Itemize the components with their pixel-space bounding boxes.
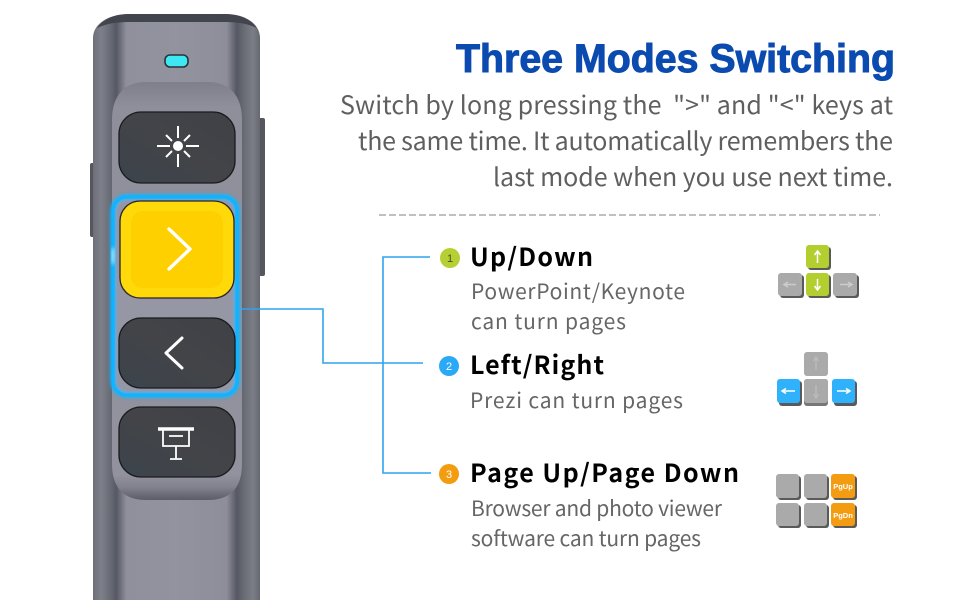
mode 1 heading: Up/Down — [470, 238, 593, 274]
mode 3 description: Browser and photo viewer — [471, 493, 723, 523]
icon: left/right keys — [777, 352, 857, 406]
mode 3 heading: Page Up/Page Down — [470, 454, 739, 490]
mode 3 description: software can turn pages — [471, 523, 701, 553]
icon: page keys: PgDn — [833, 511, 853, 520]
badge 2 — [439, 356, 459, 376]
description text: the same time. It automatically remembers the — [358, 122, 893, 158]
yellow next button — [120, 201, 234, 298]
presenter remote device — [90, 14, 265, 600]
mode 1: up/down — [440, 238, 859, 336]
device top edge — [97, 14, 257, 28]
laser button — [119, 112, 235, 183]
icon: page keys: PgUp — [833, 482, 853, 491]
description text: Switch by long pressing the ">" and "<" keys at — [340, 86, 894, 122]
mode 1 description: PowerPoint/Keynote — [471, 276, 685, 306]
mode 2: left/right — [439, 346, 857, 415]
title: Three Modes Switching — [456, 37, 895, 81]
blue glow frame — [112, 197, 237, 395]
presentation button — [119, 407, 235, 477]
description text — [340, 86, 894, 194]
icon: page keys — [776, 474, 857, 528]
left side button — [90, 163, 96, 237]
indicator light — [165, 55, 188, 67]
mode 1 description — [471, 276, 685, 336]
description text: last mode when you use next time. — [493, 158, 893, 194]
badge 1: 1 — [447, 253, 453, 265]
badge 2: 2 — [446, 361, 452, 373]
connector lines — [241, 257, 431, 473]
badge 3: 3 — [446, 469, 452, 481]
dashed divider — [379, 214, 880, 216]
button panel — [112, 82, 242, 500]
mode 2 heading: Left/Right — [470, 346, 604, 382]
icon: up/down keys — [778, 245, 859, 298]
badge 1 — [440, 248, 460, 268]
device body — [93, 14, 260, 600]
badge 3 — [439, 464, 459, 484]
previous button — [119, 318, 235, 388]
mode 2 description: Prezi can turn pages — [470, 385, 683, 415]
mode 3 description — [471, 493, 723, 553]
mode 1 description: can turn pages — [471, 306, 626, 336]
right side button — [258, 118, 265, 276]
mode 3: page up/page down — [439, 454, 857, 553]
